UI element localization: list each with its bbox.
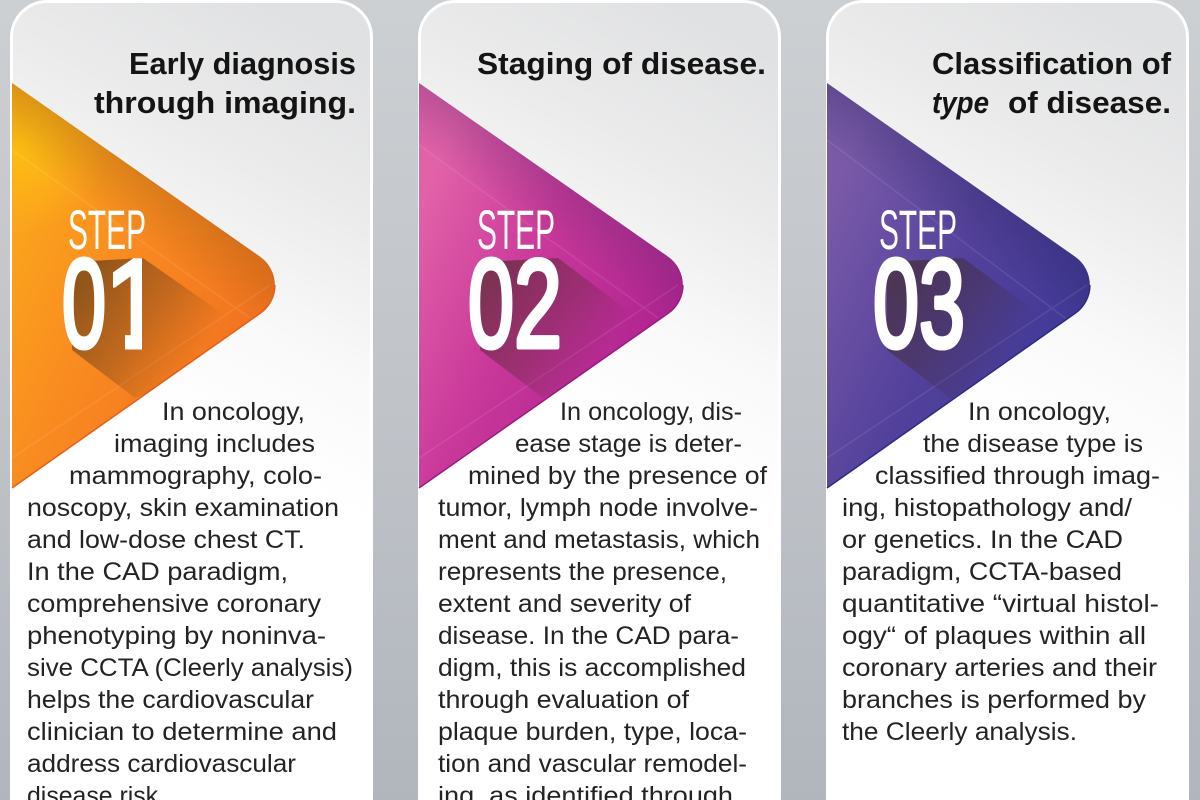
body text: step 1: helps the cardiovascular <box>27 686 314 714</box>
body text: step 3 <box>842 398 1160 746</box>
body text: step 3: coronary arteries and their <box>842 654 1157 682</box>
arrow badge: step 01 <box>12 83 275 488</box>
card 3 background <box>828 1 1188 800</box>
body text: step 2: extent and severity of <box>438 590 691 618</box>
body text: step 3: paradigm, CCTA-based <box>842 558 1122 586</box>
body text: step 3: ogy“ of plaques within all <box>842 622 1146 650</box>
heading: early diagnosis: Early diagnosis <box>129 46 356 81</box>
step number: 2 <box>514 235 562 374</box>
body text: step 3: ing, histopathology and/ <box>842 494 1132 522</box>
body text: step 2: ment and metastasis, which <box>438 526 760 554</box>
card 1 background <box>12 1 372 800</box>
body text: step 2: through evaluation of <box>438 686 689 714</box>
body text: step 2: In oncology, dis- <box>560 398 742 426</box>
heading: early diagnosis: through imaging. <box>94 85 356 120</box>
body text: step 2 <box>438 398 767 800</box>
body text: step 2: mined by the presence of <box>468 462 767 490</box>
heading: staging: Staging of disease. <box>477 46 766 81</box>
body text: step 1: and low-dose chest CT. <box>27 526 305 554</box>
step number: 3 <box>919 235 965 374</box>
body text: step 2: ease stage is deter- <box>515 430 742 458</box>
panel: step 1 <box>12 1 372 800</box>
body text: step 1: mammography, colo- <box>69 462 322 490</box>
body text: step 1: sive CCTA (Cleerly analysis) <box>27 654 353 682</box>
body text: step 3: quantitative “virtual histol- <box>842 590 1159 618</box>
heading: classification: type <box>932 85 989 120</box>
body text: step 3: In oncology, <box>968 398 1111 426</box>
heading: classification: Classification of <box>932 46 1172 81</box>
panel: step 3 <box>827 1 1188 800</box>
body text: step 1: phenotyping by noninva- <box>27 622 326 650</box>
step label: STEP <box>68 198 146 261</box>
body text: step 1 <box>27 398 353 800</box>
long shadow of number <box>72 258 216 398</box>
long shadow of number <box>480 258 621 398</box>
step number: 0 <box>468 235 514 374</box>
body text: step 3: the disease type is <box>923 430 1143 458</box>
body text: step 1: In oncology, <box>162 398 305 426</box>
step number <box>64 256 142 350</box>
body text: step 2: tumor, lymph node involve- <box>438 494 758 522</box>
heading: classification <box>932 46 1172 120</box>
heading: classification: of disease. <box>1008 85 1171 120</box>
step number: 0 <box>873 235 919 374</box>
step label: STEP <box>879 198 957 261</box>
step label: STEP <box>477 198 555 261</box>
body text: step 3: classified through imag- <box>875 462 1160 490</box>
card 2 background <box>420 1 780 800</box>
body text: step 2: disease. In the CAD para- <box>438 622 739 650</box>
arrow badge: step 02 <box>419 83 683 488</box>
long shadow of number <box>887 258 1028 398</box>
body text: step 1: comprehensive coronary <box>27 590 322 618</box>
body text: step 2: plaque burden, type, loca- <box>438 718 747 746</box>
body text: step 3: branches is performed by <box>842 686 1147 714</box>
body text: step 3: or genetics. In the CAD <box>842 526 1123 554</box>
body text: step 1: address cardiovascular <box>27 750 296 778</box>
body text: step 2: tion and vascular remodel- <box>438 750 747 778</box>
step number: 0 <box>62 235 106 374</box>
arrow badge: step 03 <box>827 83 1090 488</box>
body text: step 2: represents the presence, <box>438 558 727 586</box>
panel: step 2 <box>419 1 780 800</box>
step number: 1 <box>102 235 171 374</box>
body text: step 2: digm, this is accomplished <box>438 654 746 682</box>
body text: step 1: imaging includes <box>114 430 315 458</box>
body text: step 1: clinician to determine and <box>27 718 337 746</box>
body text: step 1: In the CAD paradigm, <box>27 558 288 586</box>
body text: step 3: the Cleerly analysis. <box>842 718 1077 746</box>
heading: early diagnosis <box>94 46 356 120</box>
body text: step 1: noscopy, skin examination <box>27 494 339 522</box>
